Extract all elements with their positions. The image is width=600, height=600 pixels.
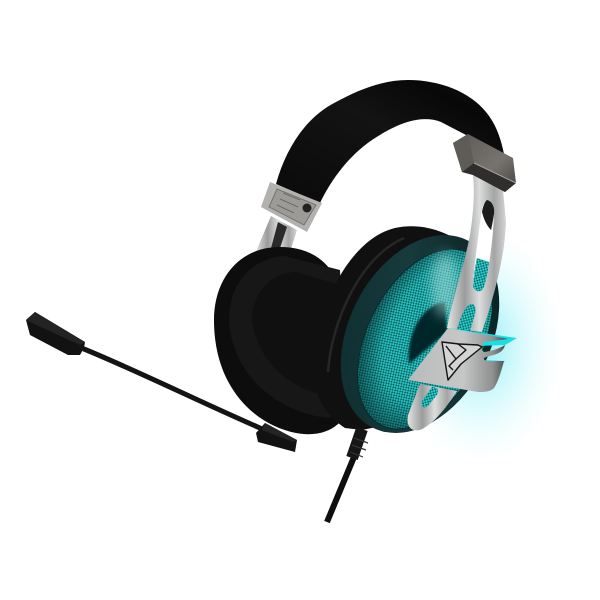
- logo plate: [408, 328, 508, 392]
- logo emblem: [442, 342, 482, 380]
- upper slot: [473, 200, 494, 291]
- headband: [276, 80, 504, 203]
- right slider: [453, 134, 516, 192]
- microphone boom: [84, 349, 260, 428]
- microphone head: [26, 312, 85, 355]
- upper slot mesh window: [473, 258, 489, 291]
- glowing light accents: [448, 328, 517, 368]
- microphone base: [256, 423, 297, 452]
- left metal arm: [255, 216, 297, 258]
- cushion stitching highlight: [328, 238, 404, 372]
- left slider with label plate: [261, 182, 322, 232]
- left ear cup: [214, 247, 345, 434]
- upper slot dark section: [482, 200, 494, 230]
- lower slot: [457, 304, 475, 331]
- right metal arm: [447, 175, 506, 332]
- cyan light glow: [395, 225, 565, 465]
- right ear cup cushion: [313, 226, 468, 430]
- cable with strain relief: [327, 429, 368, 522]
- lower metal arm: [408, 384, 457, 430]
- right ear cup rim and mesh: [309, 208, 531, 460]
